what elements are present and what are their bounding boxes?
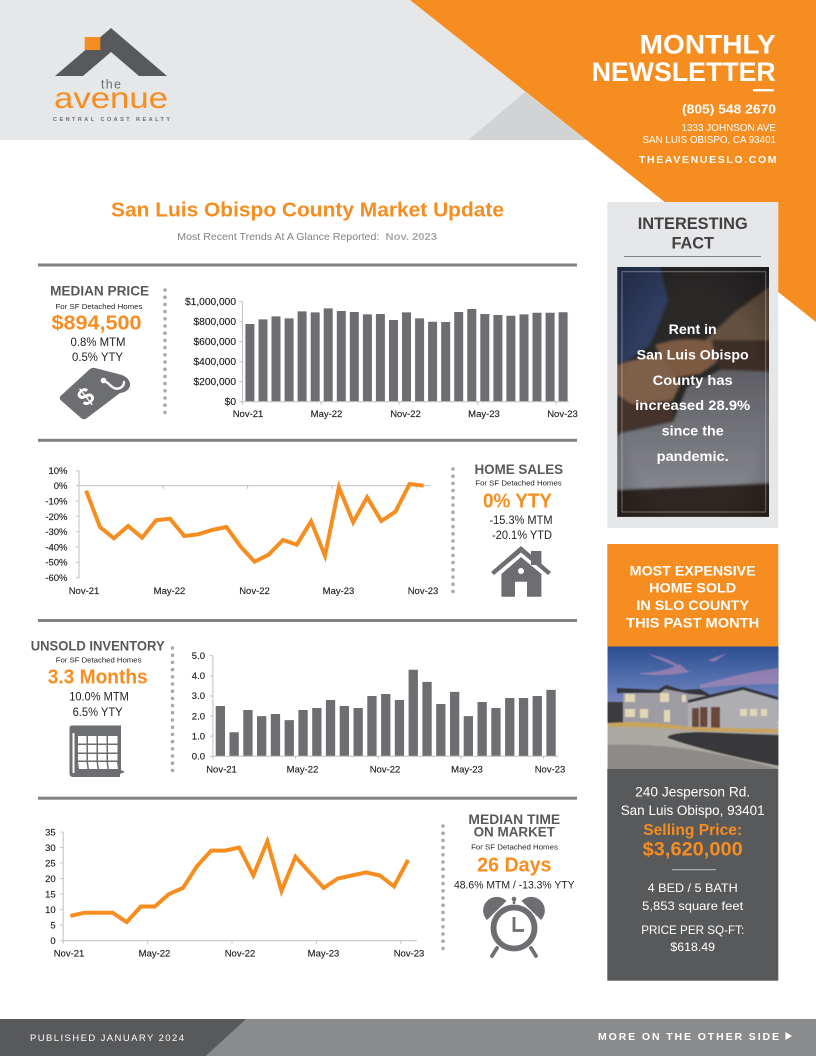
phone: (805) 548 2670 [682,101,776,116]
more on the other side: MORE ON THE OTHER SIDE [598,1031,779,1043]
y axis labels [192,651,205,763]
fact text: increased 28.9% [635,397,751,413]
bells [483,897,545,920]
x axis labels: May-23 [323,586,354,597]
line [86,484,424,562]
heading line 2: FACT [671,233,715,252]
x axis labels: Nov-21 [69,586,99,597]
hands [514,917,524,930]
icon: alarm clock [483,897,545,956]
y axis labels: -10% [45,496,68,508]
month to month: 10.0% MTM [69,689,129,703]
roof [491,546,551,575]
binding and page back [70,726,125,777]
y axis labels [185,297,236,408]
y axis labels: 30 [45,843,56,854]
walls [501,557,541,597]
panel: home sale details [607,769,778,981]
panel: unsold inventory stats [31,638,165,719]
x axis labels [69,586,438,597]
photo inner border [622,272,766,512]
year to date: -20.1% YTD [492,528,552,542]
website: THEAVENUESLO.COM [639,154,777,166]
panel: median price stats [50,284,149,364]
subheading: report date: Nov. 2023 [386,231,437,243]
value: 3.3 Months [48,666,148,688]
icon: price tag [60,368,130,419]
selling price label: Selling Price: [643,822,742,839]
y axis labels: 5 [50,921,56,932]
x axis labels: Nov-23 [408,586,438,597]
heading: MEDIAN PRICE [50,284,149,299]
axes [210,656,558,759]
icon: chimney [85,37,100,50]
bar chart: median price [185,297,578,420]
day cells [78,736,118,769]
title line 2: NEWSLETTER [592,57,776,87]
y axis labels: 0% [54,481,68,492]
logo tagline: CENTRAL COAST REALTY [53,117,170,123]
line chart: median time on market [45,827,424,960]
x axis labels: Nov-23 [535,765,565,776]
panel: home sales stats [474,462,563,542]
axes [60,832,417,944]
heading: HOME SALES [474,462,563,477]
subheading: For SF Detached Homes [475,479,562,488]
y axis labels: 5.0 [192,651,205,662]
x axis labels: Nov-21 [233,409,263,420]
y axis labels: -30% [45,527,68,538]
panel background [607,202,778,528]
x axis labels: Nov-21 [54,949,84,960]
year to year: 0.5% YTY [72,350,123,364]
y axis labels: -60% [45,573,68,584]
changes: 48.6% MTM / -13.3% YTY [454,879,575,891]
subheading: report date: Most Recent Trends At A Glance Reported: [177,231,379,243]
axes [240,302,569,405]
beds and baths: 4 BED / 5 BATH [648,881,738,895]
bars [245,308,568,402]
icon: calendar [70,726,125,777]
city: San Luis Obispo, 93401 [621,803,765,818]
logo word: avenue: avenue [54,82,168,115]
fact text: pandemic. [657,448,729,464]
photo: house at dusk [607,646,779,770]
title: MONTHLY [640,29,776,59]
clouds [640,653,778,688]
panel: most expensive home heading: MOST EXPENSIVE [630,563,756,579]
panel: median time stats [454,812,575,891]
panel: interesting fact [607,202,778,528]
y axis labels: $200,000 [194,377,236,388]
y axis labels: $400,000 [194,357,236,368]
y axis labels: -50% [45,558,68,568]
heading line 1: MEDIAN TIME [468,812,560,827]
footer bar [0,1019,816,1056]
face [494,908,534,948]
panel: most expensive home heading: IN SLO COUNTY [636,597,750,613]
header background: grey band [0,0,586,140]
y axis labels: $1,000,000 [185,297,236,308]
gravel bed [668,732,779,766]
address line 1: 1333 JOHNSON AVE [682,123,776,134]
windows [625,693,767,722]
axes [76,471,431,578]
y axis labels: 2.0 [192,711,205,722]
subheading: For SF Detached Homes [56,302,143,311]
heading line 1: INTERESTING [638,214,748,233]
icon: price tag: $ [72,382,100,412]
x axis labels [206,765,565,776]
garage roof [688,687,778,703]
chimney [531,551,541,565]
y axis labels: 0.0 [192,752,205,763]
icon: roof [55,28,167,76]
fact text: Rent in [669,321,717,337]
trees at left [607,702,624,724]
subheading: For SF Detached Homes [471,843,558,852]
published date: PUBLISHED JANUARY 2024 [30,1033,184,1044]
y axis labels: 35 [45,827,56,838]
accent rule [753,89,774,91]
fact text: County has [653,372,733,388]
selling price value: $3,620,000 [643,840,743,861]
fact text [635,321,751,464]
logo: the avenue [53,28,170,123]
year to year: 6.5% YTY [73,705,123,719]
y axis labels: 20 [45,874,56,885]
x axis labels: Nov-22 [239,586,270,597]
y axis labels [45,466,68,584]
x axis labels [233,409,578,420]
photo: handshake over paperwork [612,262,772,522]
month to month: -15.3% MTM [490,513,552,527]
x axis labels: May-22 [154,586,185,597]
bar chart: unsold inventory [192,651,565,776]
y axis labels: 4.0 [192,671,205,682]
y axis labels: 25 [45,858,56,869]
header text: monthly newsletter and contact [592,29,777,166]
panel: most expensive home heading: THIS PAST MONTH [626,615,759,631]
x axis labels: Nov-22 [225,949,255,960]
ground [607,723,779,770]
panel: most expensive home heading [607,544,778,646]
square feet: 5,853 square feet [642,899,744,913]
x axis labels [54,949,424,960]
value: $894,500 [52,312,142,334]
x axis labels: Nov-22 [390,409,421,420]
main house walls [623,688,712,726]
y axis labels: 15 [45,890,56,900]
heading: UNSOLD INVENTORY [31,638,165,653]
value: 0% YTY [483,491,553,513]
value: 26 Days [477,854,551,876]
address: 240 Jesperson Rd. [635,785,750,800]
y axis labels: 10 [45,905,56,916]
bars [216,670,556,756]
fact text: San Luis Obispo [637,347,749,363]
x axis labels: May-23 [451,765,483,776]
y axis labels: -20% [45,512,68,523]
y axis labels: $800,000 [194,317,236,328]
x axis labels: May-22 [311,409,342,420]
x axis labels: May-23 [468,409,500,420]
line chart: home sales [45,466,438,597]
x axis labels: Nov-21 [206,765,237,776]
y axis labels: 0 [50,936,56,947]
address line 2: SAN LUIS OBISPO, CA 93401 [642,135,776,146]
logo word: the: the [101,78,121,92]
header orange diagonal panel [410,0,816,322]
month to month: 0.8% MTM [70,335,126,349]
y axis labels: 3.0 [192,691,205,702]
price per square foot value: $618.49 [670,940,715,954]
price per square foot label: PRICE PER SQ-FT: [641,923,744,937]
y axis labels [45,827,56,947]
line [70,841,408,922]
main roof [617,685,712,696]
x axis labels: Nov-22 [370,765,400,776]
y axis labels: 10% [48,466,68,477]
subheading: For SF Detached Homes [56,656,142,665]
icon: arrow [785,1032,792,1040]
garage wing [688,689,778,731]
x axis labels: Nov-23 [394,949,424,960]
heading: market update: San Luis Obispo County Market Update [111,200,504,222]
legs [492,948,536,956]
heading line 2: ON MARKET [474,825,556,840]
y axis labels: -40% [45,542,68,554]
sky [607,646,779,722]
x axis labels: May-23 [308,949,339,960]
fact text: since the [662,423,724,439]
panel: most expensive home heading: HOME SOLD [649,580,736,596]
icon: house [491,546,551,597]
y axis labels: $600,000 [194,337,236,348]
y axis labels: 1.0 [192,732,205,742]
warm ground glow [608,722,778,733]
garage doors [692,707,720,729]
knob [513,899,515,904]
y axis labels: $0 [225,397,236,408]
x axis labels: Nov-23 [547,409,578,420]
x axis labels: May-22 [139,949,170,960]
x axis labels: May-22 [287,765,318,776]
